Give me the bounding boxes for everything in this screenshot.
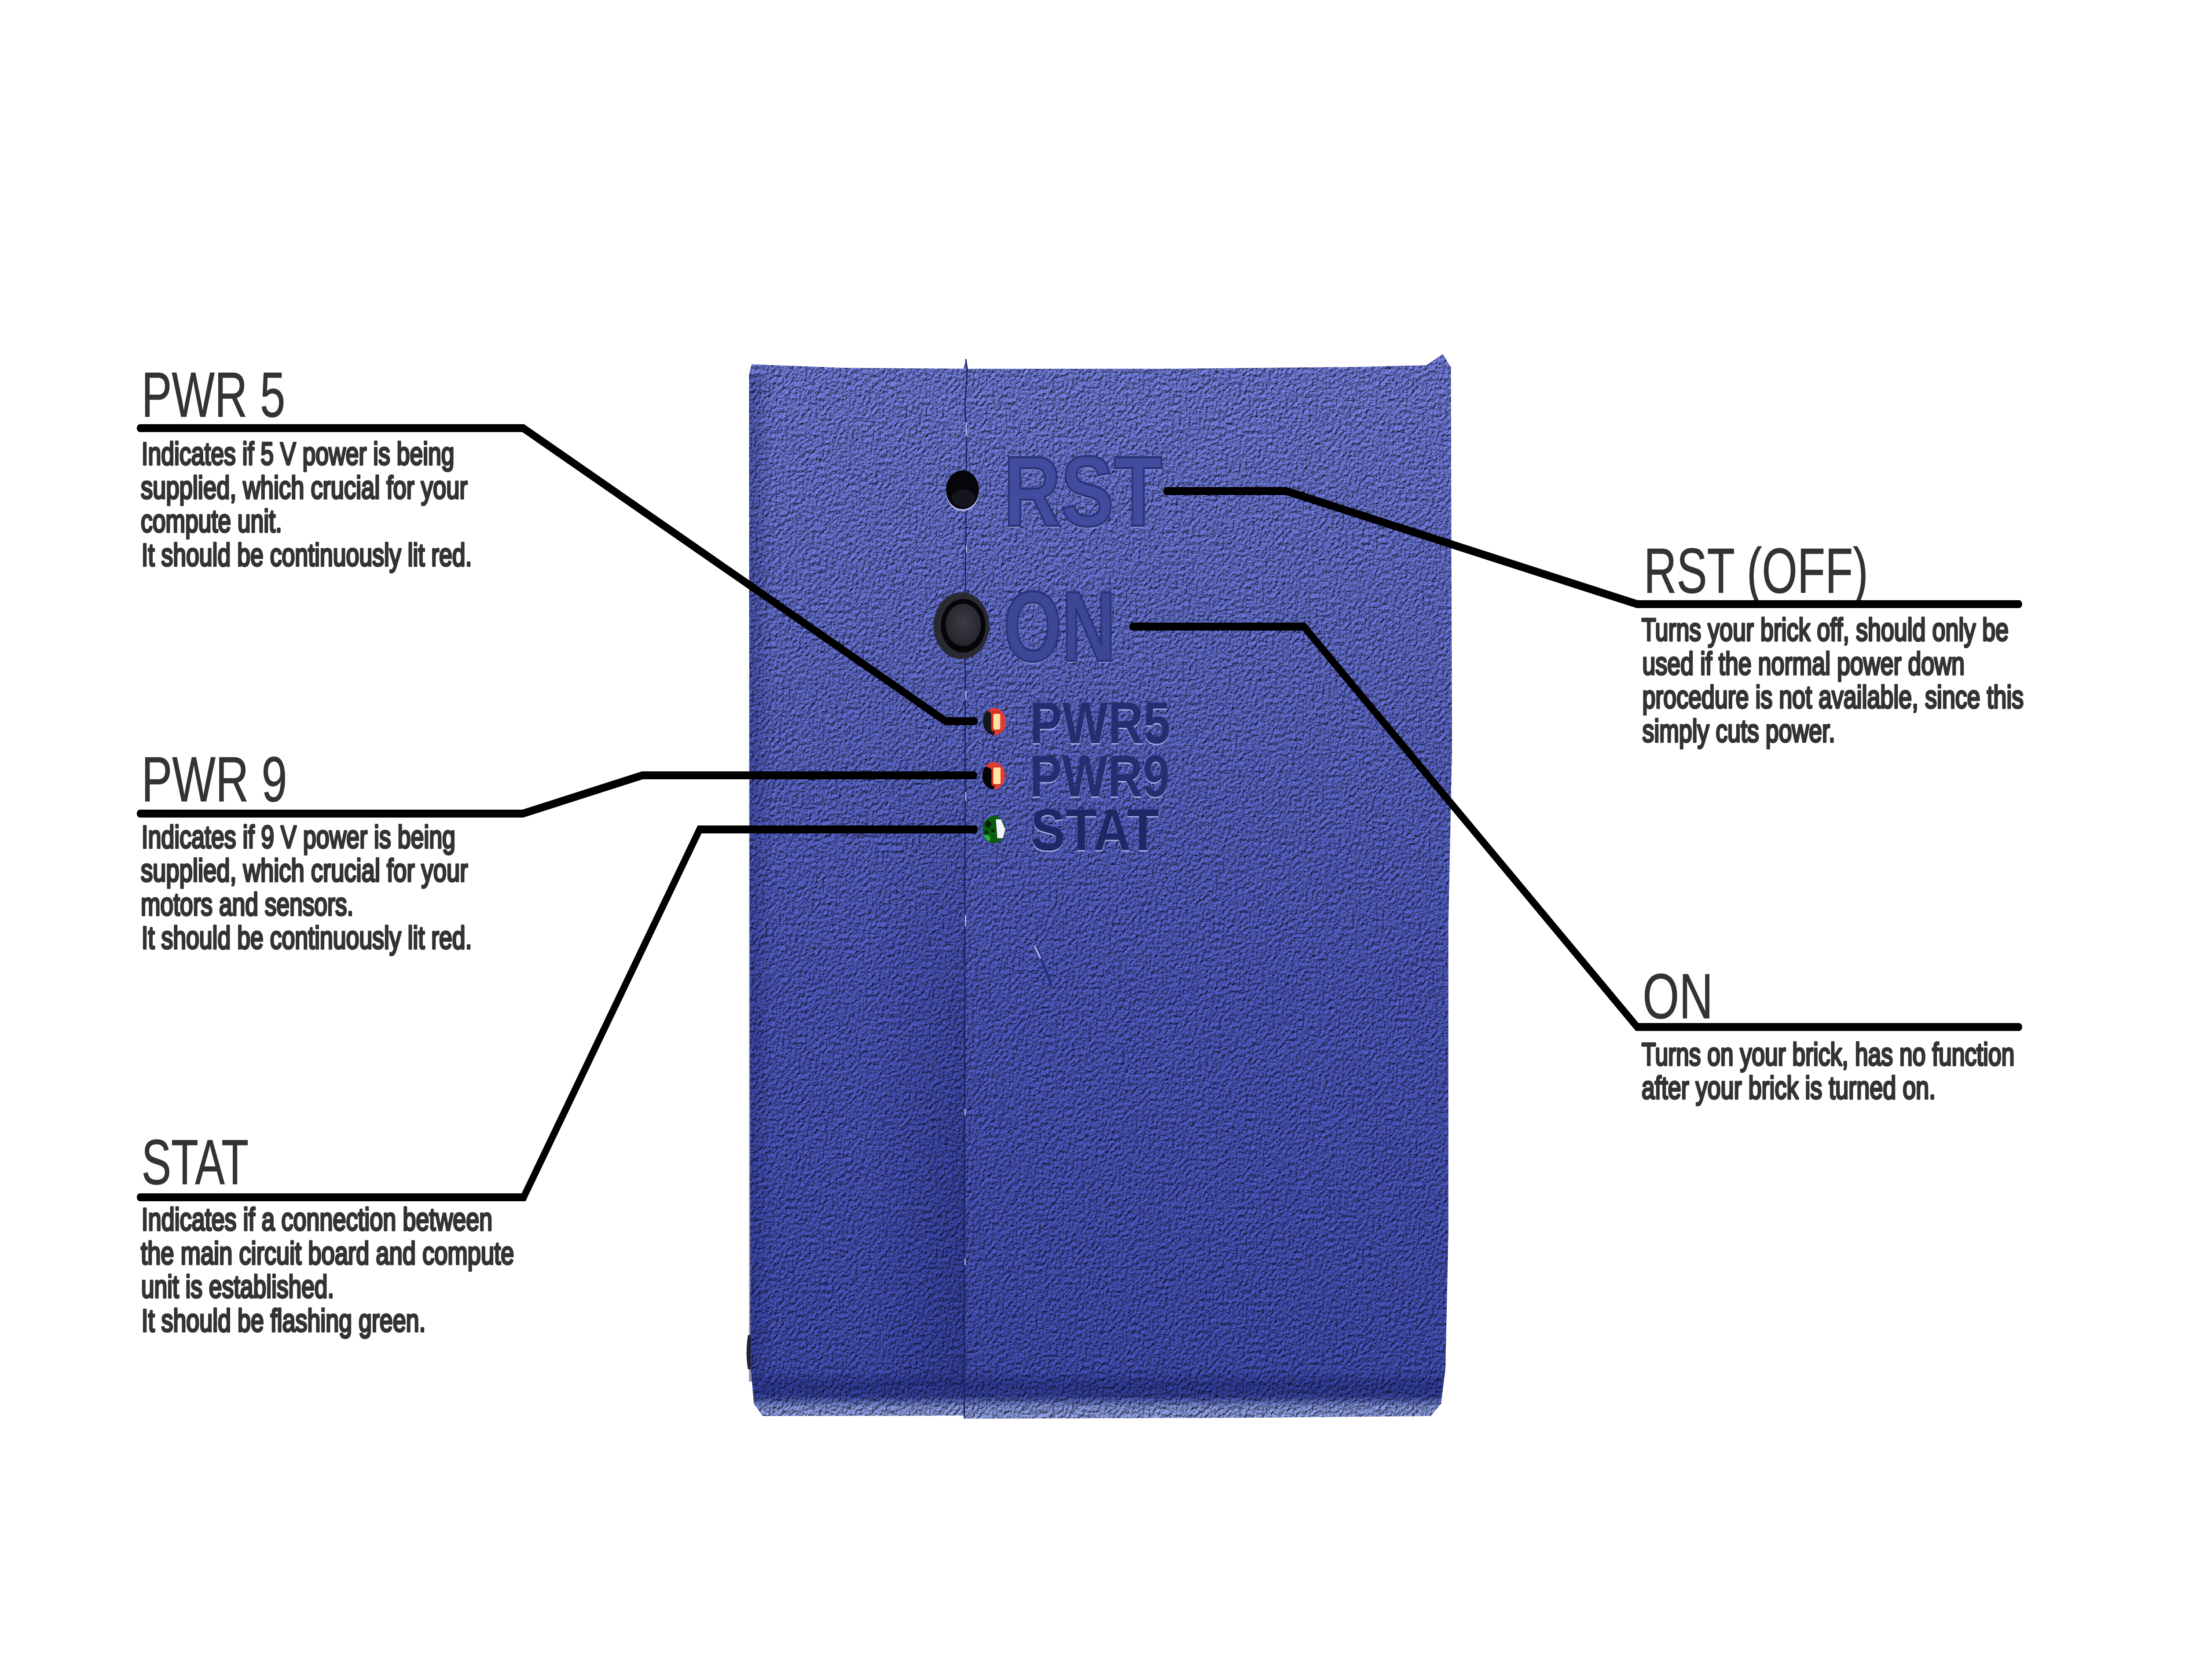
description: PWR 5: compute unit. bbox=[141, 504, 282, 539]
description: PWR 9: It should be continuously lit red. bbox=[142, 921, 472, 956]
embossed label PWR9: PWR9 bbox=[1030, 743, 1170, 809]
leader line: STAT bbox=[140, 829, 975, 1197]
brick device photo bbox=[747, 354, 1452, 1419]
description: PWR 9 bbox=[141, 820, 472, 956]
leader line: ON bbox=[1133, 627, 2019, 1027]
LED PWR5 red bbox=[983, 708, 1006, 735]
description: PWR 5 bbox=[141, 437, 472, 573]
description: PWR 5: supplied, which crucial for your bbox=[141, 470, 467, 506]
callout: PWR 9 bbox=[140, 744, 974, 956]
heading: PWR 9: PWR 9 bbox=[142, 744, 287, 815]
centre seam bbox=[964, 359, 967, 1419]
callout: STAT bbox=[140, 829, 975, 1339]
reset pinhole bbox=[946, 470, 979, 511]
description: STAT: unit is established. bbox=[141, 1269, 334, 1305]
embossed label STAT: STAT bbox=[1030, 797, 1159, 863]
dent scratch bbox=[1035, 946, 1052, 986]
heading: PWR 5: PWR 5 bbox=[142, 359, 285, 431]
embossed label PWR5: PWR5 bbox=[1030, 691, 1170, 757]
description: RST (OFF) bbox=[1642, 613, 2024, 749]
leader line: PWR 9 bbox=[140, 775, 974, 814]
embossed label RST: RST bbox=[1004, 436, 1162, 547]
description: RST (OFF): Turns your brick off, should only be bbox=[1642, 613, 2009, 648]
description: PWR 9: Indicates if 9 V power is being bbox=[142, 820, 455, 855]
on button bbox=[934, 592, 989, 659]
side connector sliver bbox=[747, 1335, 751, 1369]
heading: STAT: STAT bbox=[142, 1127, 249, 1198]
LED PWR9 red bbox=[982, 762, 1005, 789]
embossed label RST: RST bbox=[1004, 438, 1162, 549]
device body bbox=[749, 354, 1452, 1419]
description: RST (OFF): used if the normal power down bbox=[1643, 646, 1965, 682]
leader line: PWR 5 bbox=[140, 428, 975, 721]
description: STAT: It should be flashing green. bbox=[142, 1303, 426, 1339]
description: PWR 5: Indicates if 5 V power is being bbox=[142, 437, 454, 472]
description: ON: after your brick is turned on. bbox=[1642, 1071, 1936, 1106]
description: RST (OFF): simply cuts power. bbox=[1643, 714, 1835, 749]
leader line: RST (OFF) bbox=[1167, 491, 2019, 604]
heading: RST (OFF): RST (OFF) bbox=[1644, 536, 1868, 607]
description: STAT bbox=[141, 1202, 514, 1339]
embossed label PWR5: PWR5 bbox=[1030, 690, 1170, 756]
embossed label STAT: STAT bbox=[1030, 798, 1159, 864]
callout: ON bbox=[1133, 627, 2019, 1106]
embossed label PWR9: PWR9 bbox=[1030, 745, 1170, 811]
heading: ON: ON bbox=[1643, 961, 1713, 1032]
description: PWR 5: It should be continuously lit red. bbox=[142, 538, 472, 573]
callout: RST (OFF) bbox=[1167, 491, 2024, 749]
description: RST (OFF): procedure is not available, since this bbox=[1643, 680, 2024, 715]
embossed label ON: ON bbox=[1004, 573, 1116, 684]
LED STAT green bbox=[982, 815, 1006, 844]
description: PWR 9: supplied, which crucial for your bbox=[141, 853, 468, 888]
callout: PWR 5 bbox=[140, 359, 975, 721]
description: STAT: Indicates if a connection between bbox=[142, 1202, 492, 1237]
description: STAT: the main circuit board and compute bbox=[141, 1236, 514, 1271]
description: PWR 9: motors and sensors. bbox=[141, 887, 353, 922]
description: ON bbox=[1642, 1037, 2014, 1106]
embossed label ON: ON bbox=[1004, 571, 1116, 682]
description: ON: Turns on your brick, has no function bbox=[1642, 1037, 2014, 1072]
